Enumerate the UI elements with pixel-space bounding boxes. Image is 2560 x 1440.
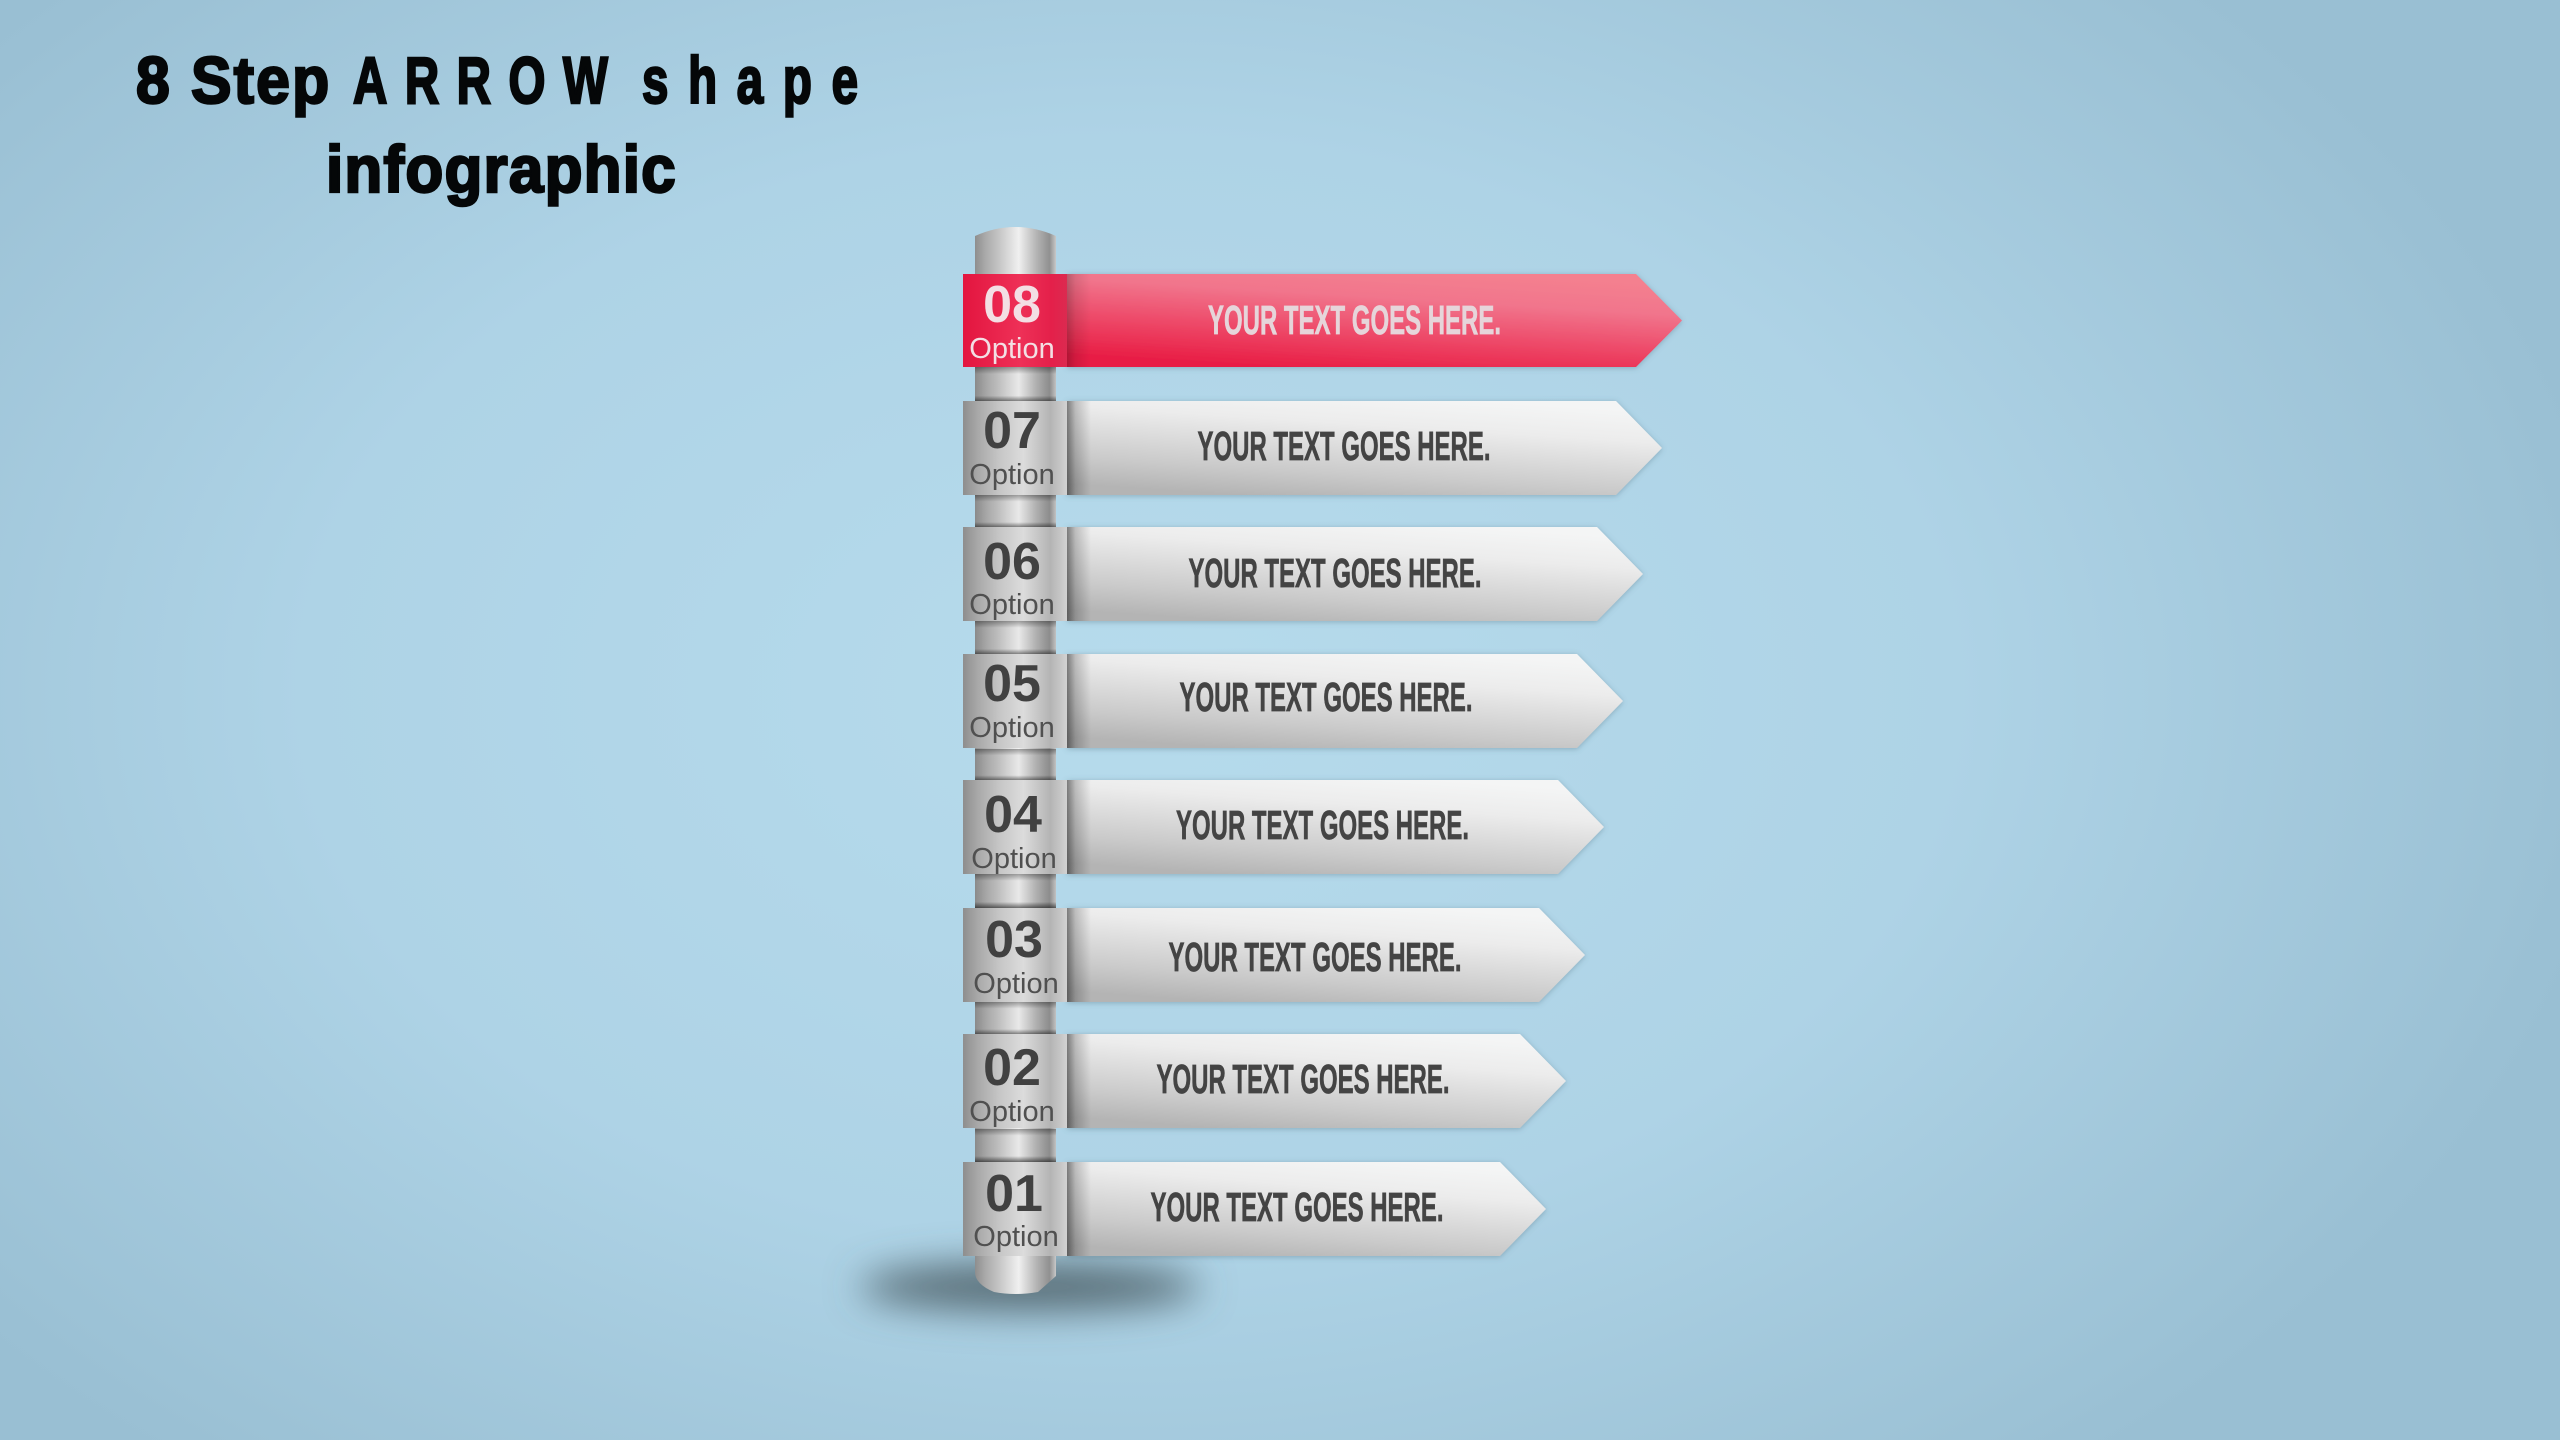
row 02 xyxy=(963,1034,1566,1128)
arrow text 04: YOUR TEXT GOES HERE. xyxy=(1176,802,1469,848)
number 07: 07 xyxy=(983,402,1041,460)
number 02: 02 xyxy=(983,1039,1041,1097)
title: infographic xyxy=(326,132,676,206)
row 04 xyxy=(963,780,1604,875)
arrow 08 xyxy=(1067,274,1682,367)
arrow 01 xyxy=(1067,1162,1546,1256)
option label 02: Option xyxy=(969,1096,1055,1128)
option label 03: Option xyxy=(973,968,1059,1000)
arrow 04 xyxy=(1067,780,1604,874)
arrow text 01: YOUR TEXT GOES HERE. xyxy=(1150,1184,1444,1230)
arrow text 05: YOUR TEXT GOES HERE. xyxy=(1180,674,1472,720)
arrow 02 xyxy=(1067,1034,1566,1128)
arrow text 03: YOUR TEXT GOES HERE. xyxy=(1168,934,1462,980)
number 05: 05 xyxy=(983,655,1041,713)
band 04 xyxy=(963,780,1067,874)
band 07 xyxy=(963,401,1067,495)
pole ground shadow xyxy=(860,1263,1200,1311)
option label 07: Option xyxy=(969,459,1055,491)
row 03 xyxy=(963,908,1585,1002)
number 03: 03 xyxy=(985,911,1043,969)
arrow text 02: YOUR TEXT GOES HERE. xyxy=(1156,1056,1450,1102)
row 05 xyxy=(963,654,1623,748)
band 02 xyxy=(963,1034,1067,1128)
row 01 xyxy=(963,1162,1546,1256)
option label 06: Option xyxy=(969,589,1055,621)
option label 01: Option xyxy=(973,1221,1059,1253)
band 08 xyxy=(963,274,1067,367)
row 06 xyxy=(963,527,1643,621)
row 08: highlighted red arrow xyxy=(963,274,1682,367)
number 01: 01 xyxy=(985,1165,1043,1223)
arrow text 08: YOUR TEXT GOES HERE. xyxy=(1208,297,1501,343)
title xyxy=(136,44,858,206)
title: ARROW xyxy=(353,44,608,118)
row 07 xyxy=(963,401,1662,495)
number 04: 04 xyxy=(984,786,1042,844)
band 06 xyxy=(963,527,1067,621)
title: shape xyxy=(642,44,858,118)
option label 08: Option xyxy=(969,333,1055,365)
arrow text 07: YOUR TEXT GOES HERE. xyxy=(1198,423,1490,469)
title: 8 Step xyxy=(136,45,329,118)
band 05 xyxy=(963,654,1067,748)
number 06: 06 xyxy=(983,533,1041,591)
arrow 03 xyxy=(1067,908,1585,1002)
pole xyxy=(975,227,1056,1294)
number 08: 08 xyxy=(983,276,1041,334)
arrow text 06: YOUR TEXT GOES HERE. xyxy=(1188,550,1482,596)
option label 04: Option xyxy=(971,843,1057,875)
band 01 xyxy=(963,1162,1067,1256)
arrow 07 xyxy=(1067,401,1662,495)
arrow 06 xyxy=(1067,527,1643,621)
arrow 05 xyxy=(1067,654,1623,748)
option label 05: Option xyxy=(969,712,1055,744)
band 03 xyxy=(963,908,1067,1002)
